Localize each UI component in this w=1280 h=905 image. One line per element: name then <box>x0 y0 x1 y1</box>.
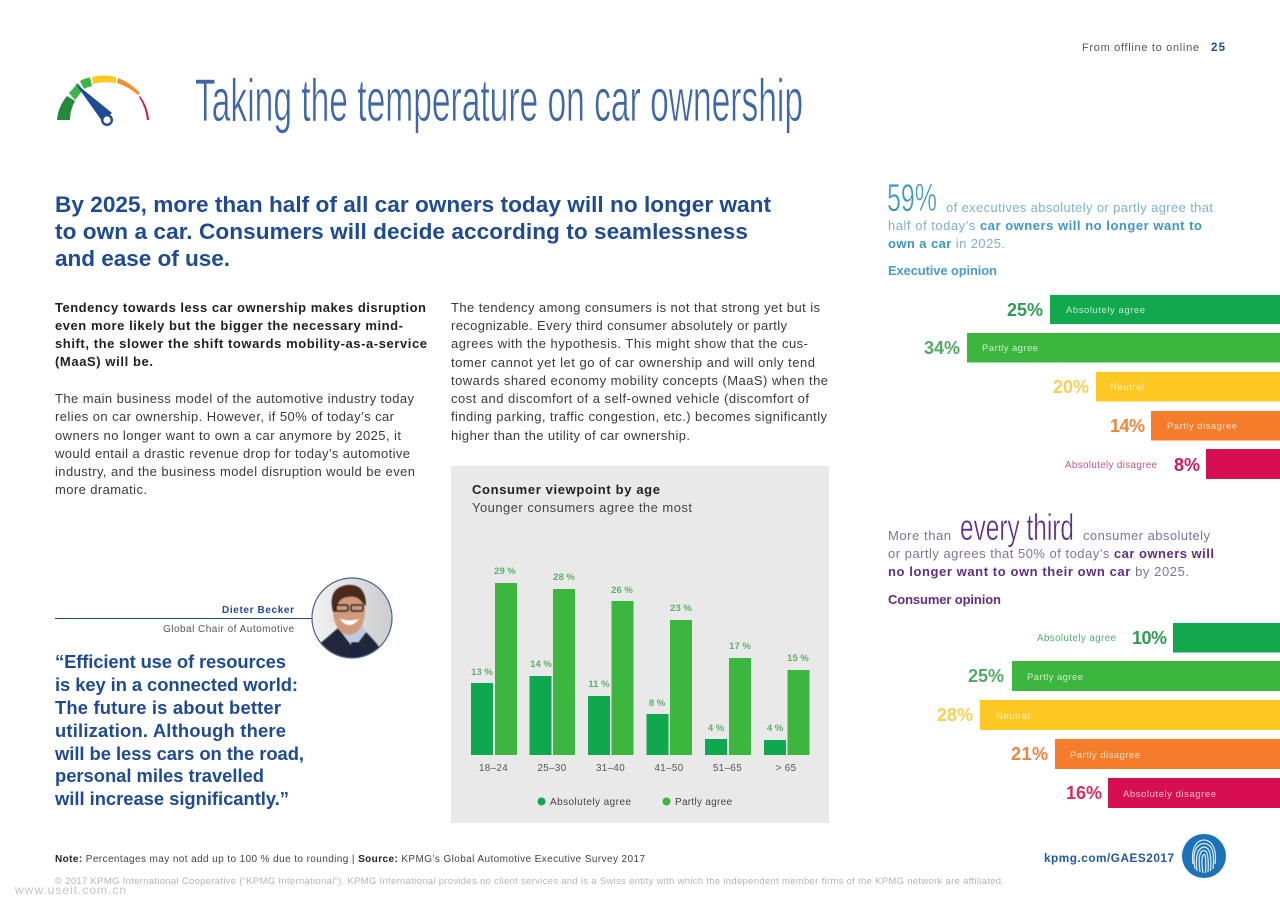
chart: executive opinion bars: Neutral <box>1110 382 1144 393</box>
quote attribution: Dieter Becker <box>222 605 294 616</box>
pull quote: The future is about better <box>55 697 281 718</box>
main heading <box>55 192 771 271</box>
bar chart: 4 % <box>767 723 784 734</box>
bar chart: 26 % <box>611 585 633 596</box>
chart heading: Younger consumers agree the most <box>472 500 692 515</box>
bar chart: 23 % <box>670 603 692 614</box>
body text: consumers: agrees with the hypothesis. This might show that the cus- <box>451 336 808 351</box>
chart: consumer opinion bars <box>937 623 1280 808</box>
chart legend <box>538 797 732 808</box>
body text: consumers: tomer cannot yet let go of car ownership and will only tend <box>451 355 815 370</box>
quote attribution <box>55 605 314 635</box>
chart: executive opinion bars: Partly agree <box>982 343 1038 354</box>
bar chart: 18–24 <box>479 763 508 774</box>
bar chart: 29 % <box>494 566 516 577</box>
intro text: bold lead: Tendency towards less car ownership makes disruption <box>55 300 426 315</box>
bar chart <box>471 566 810 774</box>
main heading: and ease of use. <box>55 246 230 271</box>
bar chart: 14 % <box>530 659 552 670</box>
bar chart: 41–50 <box>654 763 684 774</box>
body text: business model: owners no longer want to own a car anymore by 2025, it <box>55 428 401 443</box>
bar chart: 8 % <box>649 698 666 709</box>
pull quote: will be less cars on the road, <box>54 743 304 764</box>
chart: executive opinion bars: Absolutely disagree <box>1065 460 1158 471</box>
pull quote <box>54 651 304 809</box>
callout: every third consumer: or partly agrees that 50% of today’s car owners will <box>888 546 1214 561</box>
chart: executive opinion bars: 8% <box>1174 455 1200 475</box>
page header: From offline to online <box>1082 42 1199 54</box>
body text: consumers <box>451 300 828 443</box>
pull quote: will increase significantly.” <box>54 788 289 809</box>
icon: fingerprint <box>1182 834 1226 878</box>
intro text: bold lead <box>55 300 427 369</box>
callout: every third consumer: no longer want to own their own car by 2025. <box>888 564 1189 579</box>
callout: every third consumer <box>888 507 1214 579</box>
title: Taking the temperature on car ownership <box>195 67 803 134</box>
portrait photo <box>310 576 394 660</box>
heading: consumer opinion: Consumer opinion <box>888 592 1001 607</box>
body text: consumers: higher than the utility of car ownership. <box>451 428 690 443</box>
panel: consumer viewpoint by age <box>451 466 829 823</box>
callout: 59 percent of executives: half of today’s car owners will no longer want to <box>888 218 1202 233</box>
bar chart: 15 % <box>787 653 809 664</box>
bar chart: > 65 <box>776 763 797 774</box>
chart: consumer opinion bars: Absolutely disagree <box>1123 789 1216 800</box>
bar chart: 17 % <box>729 641 751 652</box>
bar chart: 25–30 <box>538 763 567 774</box>
body text: business model: The main business model of the automotive industry today <box>55 391 414 406</box>
chart: consumer opinion bars: Partly disagree <box>1070 750 1140 761</box>
chart: consumer opinion bars: 25% <box>968 666 1004 686</box>
chart: consumer opinion bars: 21% <box>1011 744 1048 764</box>
quote attribution: Global Chair of Automotive <box>163 624 294 635</box>
body text: business model: industry, and the business model disruption would be even <box>55 464 415 479</box>
chart legend: Partly agree <box>675 797 732 808</box>
pull quote: utilization. Although there <box>55 720 286 741</box>
chart: consumer opinion bars: Partly agree <box>1027 672 1083 683</box>
body text: business model: more dramatic. <box>55 482 147 497</box>
body text: consumers: finding parking, traffic congestion, etc.) becomes significantly <box>451 409 828 424</box>
intro text: bold lead: shift, the slower the shift towards mobility-as-a-service <box>55 336 427 351</box>
page header: 25 <box>1211 42 1226 54</box>
chart: executive opinion bars: 25% <box>1007 300 1043 320</box>
bar chart: 4 % <box>708 723 725 734</box>
intro text: bold lead: even more likely but the bigger the necessary mind- <box>55 318 403 333</box>
heading: executive opinion: Executive opinion <box>888 263 997 278</box>
main heading: By 2025, more than half of all car owners today will no longer want <box>55 192 771 217</box>
body text: consumers: recognizable. Every third consumer absolutely or partly <box>451 318 788 333</box>
chart: consumer opinion bars: 10% <box>1132 628 1167 648</box>
pull quote: “Efficient use of resources <box>55 651 286 672</box>
chart: executive opinion bars <box>924 295 1280 479</box>
chart: executive opinion bars: Absolutely agree <box>1066 305 1145 316</box>
callout: 59 percent of executives: own a car in 2025. <box>888 236 1005 251</box>
callout: every third consumer: every third <box>960 507 1074 548</box>
body text: business model <box>54 391 415 497</box>
callout: 59 percent of executives: 59% <box>887 177 937 220</box>
pull quote: is key in a connected world: <box>55 674 298 695</box>
callout: 59 percent of executives <box>887 177 1213 251</box>
intro text: bold lead: (MaaS) will be. <box>55 354 153 369</box>
callout: every third consumer: consumer absolutely <box>1083 528 1210 543</box>
source note: Note: Percentages may not add up to 100 % due to rounding | Source: KPMG’s Global Automotive Executive Survey 2017 <box>55 854 645 865</box>
link: kpmg.com/GAES2017 <box>1044 851 1174 865</box>
chart legend: Absolutely agree <box>550 797 631 808</box>
body text: consumers: cost and discomfort of a self-owned vehicle (discomfort of <box>451 391 809 406</box>
bar chart: 13 % <box>471 667 493 678</box>
chart: consumer opinion bars: Absolutely agree <box>1037 633 1117 644</box>
chart: consumer opinion bars: 16% <box>1066 783 1102 803</box>
callout: every third consumer: More than <box>888 528 951 543</box>
copyright: © 2017 KPMG International Cooperative (“KPMG International”). KPMG International provides no client services and is a Swiss entity with which the independent member firms of the KPMG network are affiliated. <box>55 876 1004 887</box>
chart: executive opinion bars: Partly disagree <box>1167 421 1237 432</box>
callout: 59 percent of executives: of executives absolutely or partly agree that <box>946 200 1213 215</box>
chart: executive opinion bars: 34% <box>924 338 960 358</box>
body text: business model: relies on car ownership. However, if 50% of today’s car <box>55 409 395 424</box>
chart: executive opinion bars: 20% <box>1053 377 1089 397</box>
watermark: www.useit.com.cn <box>14 883 126 897</box>
chart: consumer opinion bars: 28% <box>937 705 973 725</box>
bar chart: 11 % <box>588 679 610 690</box>
chart heading <box>472 482 692 515</box>
chart: executive opinion bars: 14% <box>1110 416 1145 436</box>
pull quote: personal miles travelled <box>55 765 264 786</box>
chart heading: Consumer viewpoint by age <box>472 482 660 497</box>
body text: business model: would entail a drastic revenue drop for today’s automotive <box>54 446 410 461</box>
body text: consumers: towards shared economy mobility concepts (MaaS) when the <box>451 373 828 388</box>
body text: consumers: The tendency among consumers is not that strong yet but is <box>451 300 820 315</box>
main heading: to own a car. Consumers will decide according to seamlessness <box>55 219 748 244</box>
bar chart: 28 % <box>553 572 575 583</box>
icon: gauge <box>57 76 149 126</box>
bar chart: 31–40 <box>596 763 625 774</box>
bar chart: 51–65 <box>713 763 742 774</box>
chart: consumer opinion bars: Neutral <box>996 711 1030 722</box>
